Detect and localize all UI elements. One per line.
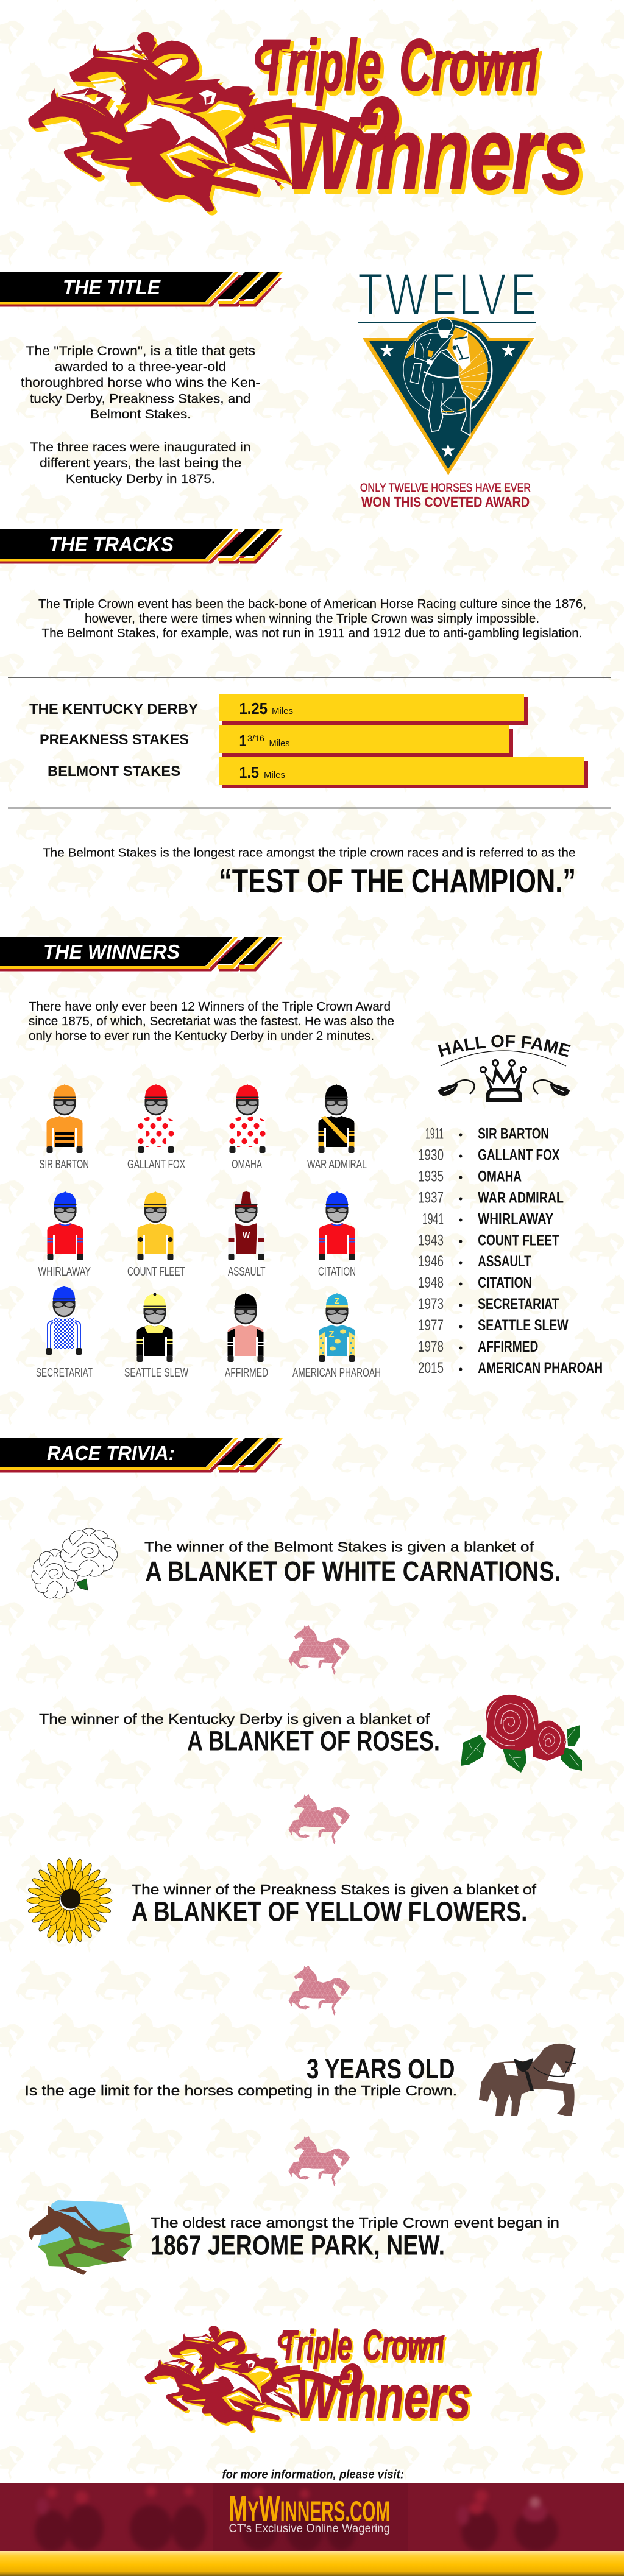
trivia: oldest race: 1867 JEROME PARK, NEW. <box>151 2229 445 2261</box>
bar: belmont stakes <box>48 757 588 788</box>
heading: twelve: E <box>511 261 536 328</box>
row: 1911: SIR BARTON <box>478 1126 549 1143</box>
row: 1948: 1948 <box>418 1274 444 1291</box>
jockey: omaha <box>229 1084 266 1171</box>
row: 1977 <box>418 1317 569 1334</box>
text block: tracks description: The Belmont Stakes, for example, was not run in 1911 and 1912 due to anti-gambling legislation. <box>41 626 583 640</box>
jockey: seattle slew <box>124 1293 188 1380</box>
text block: title description: thoroughbred horse who wins the Ken- <box>21 375 260 390</box>
trivia: kentucky derby: A BLANKET OF ROSES. <box>187 1725 440 1757</box>
row: 1911 <box>425 1126 549 1143</box>
trivia: age limit: 3 YEARS OLD <box>307 2053 455 2084</box>
banner: race trivia: RACE TRIVIA: <box>47 1442 175 1464</box>
icon: horse divider <box>288 2136 350 2186</box>
bar: preakness stakes: 1 <box>239 732 246 750</box>
jockey: seattle slew: SEATTLE SLEW <box>124 1366 188 1380</box>
row: 1977: SEATTLE SLEW <box>478 1317 569 1334</box>
bar: preakness stakes: Miles <box>269 738 290 749</box>
main title logo: Triple <box>262 27 384 109</box>
footer band: MYWINNERS.COM <box>229 2488 390 2529</box>
jockey: gallant fox: GALLANT FOX <box>127 1158 185 1171</box>
icon: crown <box>438 1060 570 1102</box>
text block: winners description: since 1875, of which, Secretariat was the fastest. He was also the <box>29 1015 394 1028</box>
small title logo: Winners <box>295 2363 471 2431</box>
row: 1937: WAR ADMIRAL <box>478 1189 564 1206</box>
text block: title description: awarded to a three-year-old <box>55 359 226 374</box>
banner: the title <box>0 272 283 307</box>
row: 1937: 1937 <box>418 1189 444 1206</box>
row: 1973: SECRETARIAT <box>478 1296 559 1313</box>
row: 1946: 1946 <box>418 1253 444 1270</box>
main title logo: Triple <box>260 24 381 106</box>
banner: the winners <box>0 937 283 971</box>
jockey: whirlaway <box>38 1191 91 1279</box>
icon: yellow flower <box>27 1858 112 1943</box>
row: 1978 <box>418 1338 538 1355</box>
icon: roses <box>461 1695 582 1773</box>
jockey: sir barton <box>39 1084 89 1171</box>
trivia: oldest race: The oldest race amongst the Triple Crown event began in <box>151 2215 559 2231</box>
text block: title description: different years, the last being the <box>40 456 241 470</box>
caption: only twelve horses: ONLY TWELVE HORSES HAVE EVER <box>360 481 531 495</box>
bar chart: race distances <box>29 694 588 788</box>
icon: horse divider <box>288 1625 350 1675</box>
jockey: citation <box>318 1191 356 1279</box>
main title logo: Crown <box>399 24 538 106</box>
jockey: american pharoah: AMERICAN PHAROAH <box>292 1366 381 1380</box>
row: 1930: GALLANT FOX <box>478 1146 560 1163</box>
heading: twelve: V <box>478 261 506 328</box>
footer racing silhouettes <box>35 2486 558 2552</box>
jockey: american pharoah: Z <box>328 1329 335 1339</box>
jockey: american pharoah: Z <box>335 1296 339 1305</box>
row: 1978: AFFIRMED <box>478 1338 538 1355</box>
bar: kentucky derby: Miles <box>272 706 293 716</box>
text: belmont longest race: The Belmont Stakes is the longest race amongst the triple crown races and is referred to as the <box>43 845 576 860</box>
text block: tracks description <box>38 597 586 640</box>
row: 1978: 1978 <box>418 1338 444 1355</box>
jockey: affirmed <box>225 1293 268 1380</box>
row: 2015 <box>418 1360 603 1377</box>
small title logo: Crown <box>364 2323 445 2371</box>
jockey: citation: CITATION <box>318 1265 356 1279</box>
trivia: kentucky derby <box>39 1711 440 1757</box>
heading: twelve: L <box>459 261 481 328</box>
icon: white carnations <box>32 1528 118 1598</box>
row: 1941: WHIRLAWAY <box>478 1210 554 1227</box>
small title logo: Triple <box>282 2323 353 2371</box>
banner: the tracks: THE TRACKS <box>49 533 174 556</box>
jockey: secretariat <box>36 1286 93 1380</box>
jockey: affirmed: AFFIRMED <box>225 1366 268 1380</box>
text block: title description: The "Triple Crown", is a title that gets <box>26 344 255 358</box>
trivia: age limit: Is the age limit for the horses competing in the Triple Crown. <box>24 2083 457 2098</box>
jockey: war admiral <box>307 1084 367 1171</box>
trivia: belmont stakes: The winner of the Belmont Stakes is given a blanket of <box>144 1539 534 1554</box>
small title logo: Triple <box>280 2321 352 2369</box>
icon: horse divider <box>288 1966 350 2016</box>
banner: the title: THE TITLE <box>63 276 161 298</box>
heading: twelve <box>358 261 536 328</box>
text: more information: for more information, please visit: <box>222 2468 404 2482</box>
heading: twelve: E <box>431 261 456 328</box>
bar: kentucky derby: 1.25 <box>239 699 268 718</box>
main title logo <box>28 24 586 216</box>
jockey: assault: W <box>243 1230 250 1240</box>
text block: tracks description: The Triple Crown event has been the back-bone of American Horse Racing culture since the 1876, <box>38 597 586 611</box>
bar: preakness stakes: PREAKNESS STAKES <box>40 732 189 748</box>
jockey: war admiral: WAR ADMIRAL <box>307 1158 367 1171</box>
row: 1973 <box>418 1296 559 1313</box>
small title logo: Crown <box>363 2321 444 2369</box>
trivia: age limit <box>24 2053 457 2098</box>
bar: belmont stakes: Miles <box>264 770 285 780</box>
bar: kentucky derby: THE KENTUCKY DERBY <box>29 701 198 718</box>
text block: winners description: There have only ever been 12 Winners of the Triple Crown Award <box>29 1000 391 1014</box>
text block: winners description: only horse to ever run the Kentucky Derby in under 2 minutes. <box>29 1029 374 1043</box>
row: 1937 <box>418 1189 564 1206</box>
icon: landscape horse logo <box>29 2200 133 2275</box>
trivia: preakness stakes: A BLANKET OF YELLOW FLOWERS. <box>132 1896 528 1927</box>
main title logo: Crown <box>402 27 541 109</box>
heading: twelve: T <box>358 261 383 328</box>
trivia: belmont stakes <box>144 1539 561 1587</box>
jockey: count fleet <box>127 1191 185 1279</box>
row: 1911: 1911 <box>425 1126 444 1143</box>
small title logo: Winners <box>296 2365 472 2433</box>
heading: hall of fame: HALL OF FAME <box>438 1034 570 1057</box>
text block: winners description <box>29 1000 394 1043</box>
text block: title description: tucky Derby, Preakness Stakes, and <box>30 391 251 406</box>
banner: the tracks <box>0 529 283 564</box>
text block: tracks description: however, there were times when winning the Triple Crown was simply impossible. <box>85 612 539 626</box>
caption: only twelve horses: WON THIS COVETED AWARD <box>361 494 530 510</box>
row: 1930: 1930 <box>418 1146 444 1163</box>
bar: kentucky derby <box>29 694 528 725</box>
text block: title description: Kentucky Derby in 1875. <box>66 471 215 486</box>
banner: the winners: THE WINNERS <box>43 940 180 963</box>
banner: race trivia <box>0 1438 283 1473</box>
bar: belmont stakes: 1.5 <box>239 763 259 782</box>
icon: horse divider <box>288 1794 350 1844</box>
text block: title description <box>21 344 260 486</box>
trivia: kentucky derby: The winner of the Kentucky Derby is given a blanket of <box>39 1711 430 1727</box>
trivia: preakness stakes: The winner of the Preakness Stakes is given a blanket of <box>132 1882 537 1897</box>
row: 1946 <box>418 1253 531 1270</box>
row: 1943: 1943 <box>418 1232 444 1249</box>
jockey: whirlaway: WHIRLAWAY <box>38 1265 91 1279</box>
small title logo <box>145 2321 472 2433</box>
jockey: sir barton: SIR BARTON <box>39 1158 89 1171</box>
row: 1935: OMAHA <box>478 1168 522 1185</box>
jockey: omaha: OMAHA <box>232 1158 262 1171</box>
text block: title description: Belmont Stakes. <box>90 407 191 422</box>
footer band: CT's Exclusive Online Wagering <box>229 2522 390 2535</box>
emblem: jockey triangle <box>363 317 534 475</box>
row: 1973: 1973 <box>418 1296 444 1313</box>
bar: preakness stakes: 3/16 <box>247 733 264 743</box>
caption: only twelve horses <box>360 481 531 510</box>
jockey: secretariat: SECRETARIAT <box>36 1366 93 1380</box>
bar: preakness stakes <box>40 725 513 757</box>
row: 1935: 1935 <box>418 1168 444 1185</box>
footer band <box>0 2483 624 2552</box>
row: 1977: 1977 <box>418 1317 444 1334</box>
text block: title description: The three races were inaugurated in <box>30 440 251 454</box>
list: hall of fame years and names <box>418 1126 603 1377</box>
heading: twelve: W <box>385 261 428 328</box>
jockey: assault <box>228 1191 266 1279</box>
jockey: american pharoah <box>292 1293 381 1380</box>
row: 1948: CITATION <box>478 1274 532 1291</box>
row: 1948 <box>418 1274 532 1291</box>
bar: belmont stakes: BELMONT STAKES <box>48 763 180 780</box>
row: 1941 <box>422 1210 554 1227</box>
footer gold bar <box>0 2551 624 2576</box>
jockey: assault: ASSAULT <box>228 1265 266 1279</box>
row: 2015: 2015 <box>418 1360 444 1377</box>
row: 1930 <box>418 1146 560 1163</box>
row: 1935 <box>418 1168 522 1185</box>
row: 1943 <box>418 1232 559 1249</box>
row: 1946: ASSAULT <box>478 1253 531 1270</box>
jockey: count fleet: COUNT FLEET <box>127 1265 185 1279</box>
icon: brown horse with saddle <box>479 2044 576 2116</box>
row: 1943: COUNT FLEET <box>478 1232 559 1249</box>
jockey: gallant fox <box>127 1084 185 1171</box>
jockey grid <box>36 1084 381 1380</box>
row: 1941: 1941 <box>422 1210 444 1227</box>
trivia: oldest race <box>151 2215 559 2261</box>
trivia: preakness stakes <box>132 1882 537 1927</box>
